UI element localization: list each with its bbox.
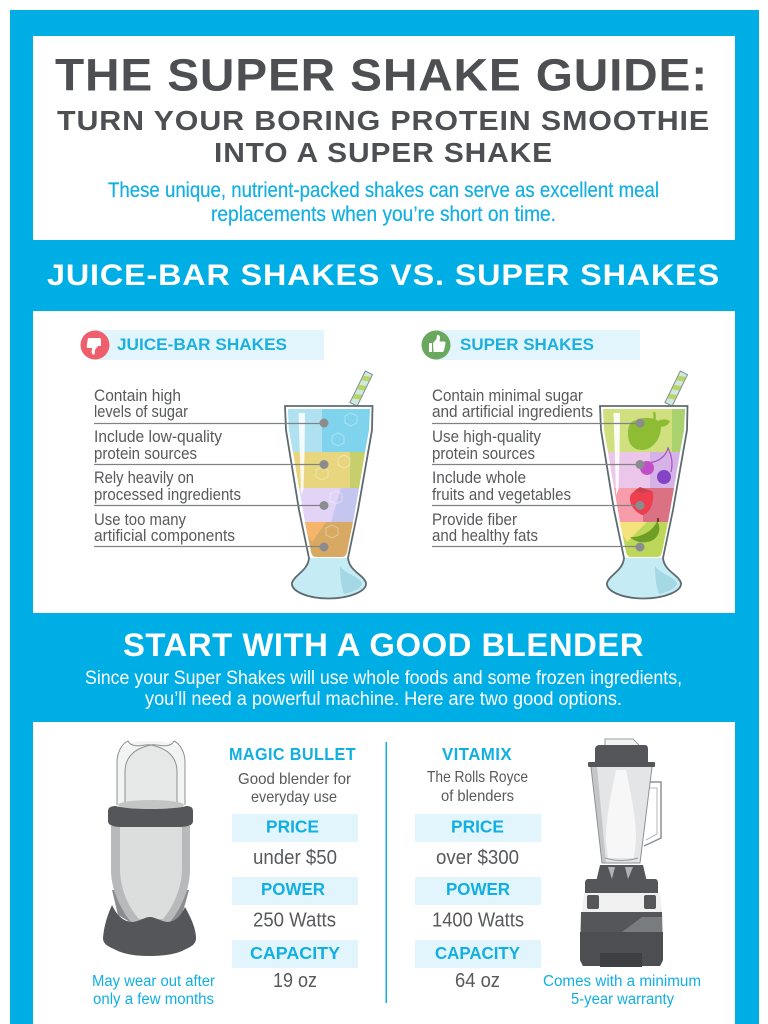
- specs: magic bullet: under $50: [253, 847, 337, 869]
- specs: vitamix: POWER: [446, 879, 510, 899]
- label: juice-bar shakes: JUICE-BAR SHAKES: [117, 335, 287, 354]
- subtitle: [57, 105, 710, 168]
- list: super shake benefits: Provide fiber: [432, 510, 517, 529]
- specs: vitamix: over $300: [436, 847, 519, 869]
- heading: start with a good blender: START WITH A GOOD BLENDER: [123, 627, 644, 663]
- specs: vitamix: VITAMIX: [442, 744, 512, 764]
- list: juice-bar shake problems: Rely heavily on: [94, 468, 194, 487]
- callout lines: super shake layers: [432, 418, 644, 552]
- list: super shake benefits: Include whole: [432, 468, 526, 487]
- list: super shake benefits: protein sources: [432, 444, 535, 463]
- list: super shake benefits: Contain minimal sugar: [432, 386, 583, 405]
- title: THE SUPER SHAKE GUIDE:: [55, 50, 708, 100]
- specs: magic bullet: Good blender for: [238, 771, 352, 788]
- list: super shake benefits: and healthy fats: [432, 526, 538, 545]
- list: juice-bar shake problems: [94, 386, 241, 545]
- label: super shakes: [422, 330, 640, 360]
- specs: vitamix: [415, 744, 541, 992]
- icon: cherries: [640, 448, 672, 484]
- caption: vitamix: [543, 973, 701, 1008]
- intro text: These unique, nutrient-packed shakes can serve as excellent meal: [108, 179, 659, 202]
- list: juice-bar shake problems: Use too many: [94, 510, 186, 529]
- specs: magic bullet: PRICE: [266, 816, 319, 836]
- list: juice-bar shake problems: levels of sugar: [94, 402, 188, 421]
- icon: banana: [630, 518, 659, 542]
- icon: apple: [628, 412, 670, 450]
- specs: magic bullet: MAGIC BULLET: [229, 744, 356, 764]
- specs: magic bullet: 19 oz: [273, 970, 317, 992]
- illustration: juice-bar shake glass: [280, 371, 380, 598]
- caption: vitamix: 5-year warranty: [571, 991, 674, 1008]
- panel: header: [33, 36, 735, 240]
- intro text: replacements when you’re short on time.: [211, 203, 556, 226]
- label: super shakes: SUPER SHAKES: [460, 335, 594, 354]
- specs: vitamix: CAPACITY: [435, 943, 520, 963]
- specs: vitamix: PRICE: [451, 816, 504, 836]
- callout lines: juice-bar shake layers: [94, 418, 328, 552]
- specs: magic bullet: CAPACITY: [250, 943, 340, 963]
- list: super shake benefits: [432, 386, 593, 545]
- subtitle: TURN YOUR BORING PROTEIN SMOOTHIE: [57, 105, 710, 136]
- specs: magic bullet: everyday use: [251, 789, 337, 806]
- icon: strawberry: [630, 487, 653, 515]
- intro text: [108, 179, 659, 226]
- panel: blenders: [33, 722, 735, 1024]
- list: super shake benefits: and artificial ingredients: [432, 402, 593, 421]
- caption: magic bullet: only a few months: [93, 991, 214, 1008]
- list: juice-bar shake problems: artificial components: [94, 526, 235, 545]
- heading: juice-bar vs super shakes: JUICE-BAR SHAKES VS. SUPER SHAKES: [47, 259, 720, 292]
- specs: magic bullet: [229, 744, 358, 992]
- list: juice-bar shake problems: protein sources: [94, 444, 197, 463]
- caption: magic bullet: May wear out after: [92, 973, 215, 990]
- blender intro text: Since your Super Shakes will use whole foods and some frozen ingredients,: [85, 668, 682, 689]
- specs: magic bullet: 250 Watts: [253, 910, 336, 932]
- illustration: magic bullet blender: [103, 741, 196, 956]
- blender intro text: [85, 668, 682, 710]
- specs: vitamix: The Rolls Royce: [427, 769, 528, 786]
- illustration: vitamix blender: [580, 739, 663, 967]
- specs: magic bullet: POWER: [261, 879, 325, 899]
- caption: vitamix: Comes with a minimum: [543, 973, 701, 990]
- specs: vitamix: 1400 Watts: [432, 910, 524, 932]
- illustration: super shake glass: [595, 371, 695, 598]
- label: juice-bar shakes: [80, 330, 324, 360]
- list: super shake benefits: Use high-quality: [432, 427, 541, 446]
- list: juice-bar shake problems: Contain high: [94, 386, 181, 405]
- specs: vitamix: of blenders: [441, 788, 514, 805]
- panel: comparison: [33, 311, 735, 613]
- list: juice-bar shake problems: Include low-quality: [94, 427, 222, 446]
- caption: magic bullet: [92, 973, 215, 1008]
- list: super shake benefits: fruits and vegetables: [432, 485, 571, 504]
- subtitle: INTO A SUPER SHAKE: [214, 137, 553, 168]
- list: juice-bar shake problems: processed ingredients: [94, 485, 241, 504]
- specs: vitamix: 64 oz: [455, 970, 500, 992]
- blender intro text: you’ll need a powerful machine. Here are two good options.: [145, 689, 622, 710]
